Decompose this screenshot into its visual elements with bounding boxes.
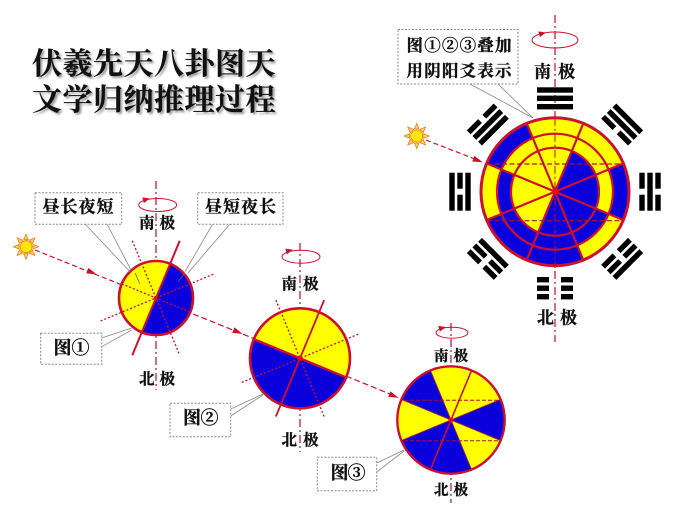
south pole label 1: 南 极 [139, 213, 175, 232]
north pole label 3: 北 极 [434, 481, 468, 499]
trigrams [449, 87, 661, 299]
callout: figure 2: 图② [183, 408, 218, 428]
callout: day long night short [35, 193, 140, 284]
axis 2 [299, 243, 301, 452]
south pole label 3: 南 极 [434, 347, 468, 365]
title [32, 48, 278, 117]
callout: day short night long: 昼短夜长 [205, 198, 276, 216]
north pole label 4: 北 极 [537, 308, 577, 328]
middle ring sectors [497, 134, 613, 250]
sun 2 [404, 124, 429, 148]
callout: figure 3 [317, 450, 404, 491]
axis 4 [554, 15, 556, 342]
trigram: xun, upper right [601, 104, 643, 146]
rotation arrow 3 [436, 324, 468, 338]
axis 3 [450, 323, 452, 503]
north pole label 1: 北 极 [139, 369, 175, 388]
callout: figure 1 [41, 328, 132, 364]
axis 1 [155, 181, 157, 390]
sun ray to circle 3 [346, 376, 400, 401]
callout: figure 3: 图③ [330, 463, 366, 483]
trigram: zhen, lower left [467, 238, 509, 280]
sun ray to circle 1 [35, 250, 122, 285]
trigram: li, left [449, 173, 471, 211]
rotation arrow 2 [282, 247, 320, 263]
callout: day short night long [178, 193, 283, 282]
diagram 2 [170, 243, 365, 452]
trigram: qian, south [537, 87, 573, 109]
diagram 3 [317, 323, 505, 503]
south pole label 2: 南 极 [282, 274, 319, 293]
diagram 1: day longer and night shorter [14, 181, 283, 390]
trigram: dui, upper left [467, 104, 509, 146]
callout: superimposed figures: 图①②③叠加 [406, 35, 512, 55]
circle 2 [235, 293, 365, 424]
inner ring sectors [511, 148, 599, 236]
callout: figure 1: 图① [54, 338, 90, 358]
sun 1 [14, 234, 38, 259]
north pole label 2: 北 极 [282, 430, 319, 449]
circle 1 [99, 241, 213, 355]
diagram: superimposed bagua [398, 15, 661, 342]
outer ring sectors [481, 118, 629, 266]
title: 伏羲先天八卦图天 [32, 48, 276, 81]
circle 3 [397, 366, 505, 474]
trigram: kan, right [639, 173, 661, 211]
callout: day long night short: 昼长夜短 [42, 198, 114, 216]
title: 文学归纳推理过程 [32, 84, 276, 117]
rotation arrow 1 [139, 196, 177, 212]
trigram: gen, lower right [601, 238, 643, 280]
bagua ring chart [481, 118, 629, 266]
callout: superimposed figures [398, 30, 533, 118]
sun ray to bagua circle [426, 140, 484, 165]
callout: figure 2 [170, 394, 263, 437]
rotation arrow 4 [532, 30, 578, 48]
trigram: kun, north [537, 277, 573, 299]
sun ray to circle 2 [193, 314, 255, 339]
south pole label 4: 南 极 [534, 62, 575, 82]
callout: superimposed figures: 用阴阳爻表示 [406, 60, 513, 80]
